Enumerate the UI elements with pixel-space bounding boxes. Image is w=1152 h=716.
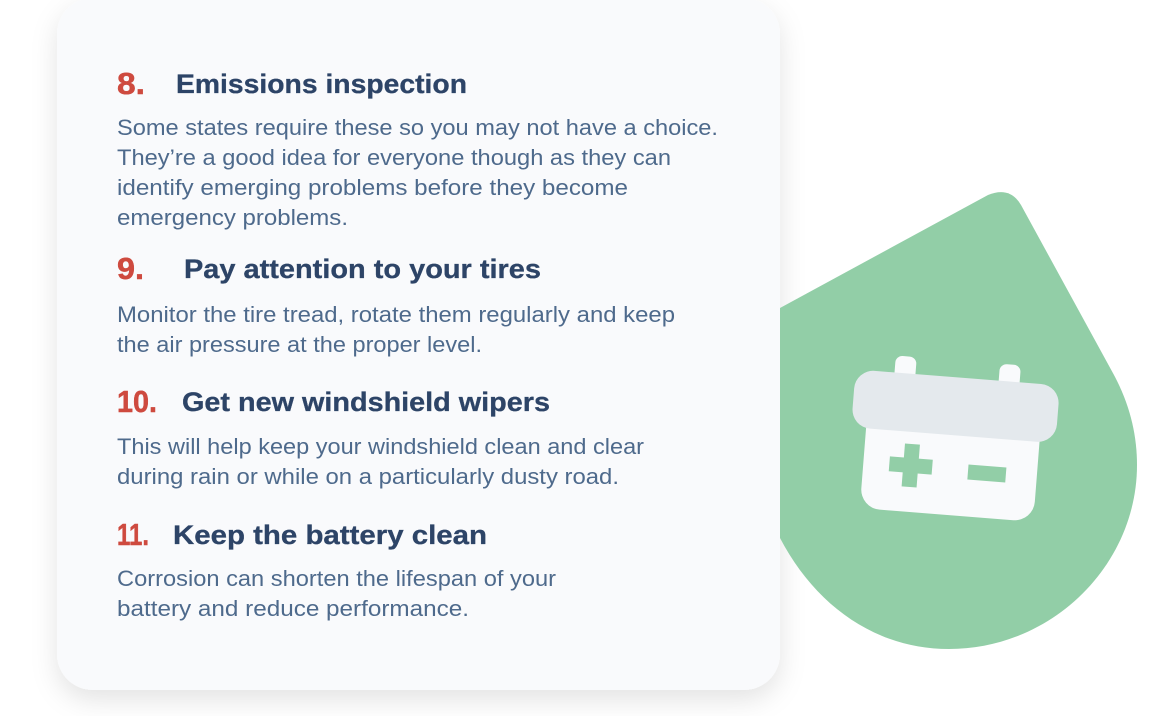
droplet shape [780,192,1137,649]
tip 8 text: emergency problems. [117,205,348,230]
tip 10 heading: 10. [117,384,157,419]
tip 9 text: Monitor the tire tread, rotate them regularly and keep [117,302,675,327]
tip 8 text [117,115,718,230]
tip 10 text: during rain or while on a particularly dusty road. [117,464,619,489]
tip 8 text: identify emerging problems before they become [117,175,628,200]
tip 10 text: This will help keep your windshield clean and clear [117,434,644,459]
tip 11 text: battery and reduce performance. [117,596,469,621]
tip 8 heading: 8. [117,66,145,101]
tip 10 heading: Get new windshield wipers [182,387,550,417]
tip 8 text: Some states require these so you may not have a choice. [117,115,718,140]
panel: tips card [57,0,780,690]
tip 11 heading [117,517,487,552]
tip 8 heading [117,66,467,101]
tip 9 heading: 9. [117,251,144,286]
tip 10 text [117,434,644,489]
tip 11 text [117,566,556,621]
tip 8 heading: Emissions inspection [176,69,467,99]
tip 11 text: Corrosion can shorten the lifespan of your [117,566,556,591]
tip 11 heading: Keep the battery clean [173,520,487,550]
tip 9 heading [117,251,541,286]
tip 11 heading: 11. [117,517,149,552]
tip 10 heading [117,384,550,419]
tip 9 text [117,302,675,357]
icon: battery [845,352,1061,523]
green droplet with battery icon [780,192,1137,649]
tip 8 text: They’re a good idea for everyone though as they can [117,145,671,170]
tip 9 text: the air pressure at the proper level. [117,332,482,357]
tip 9 heading: Pay attention to your tires [184,254,541,284]
